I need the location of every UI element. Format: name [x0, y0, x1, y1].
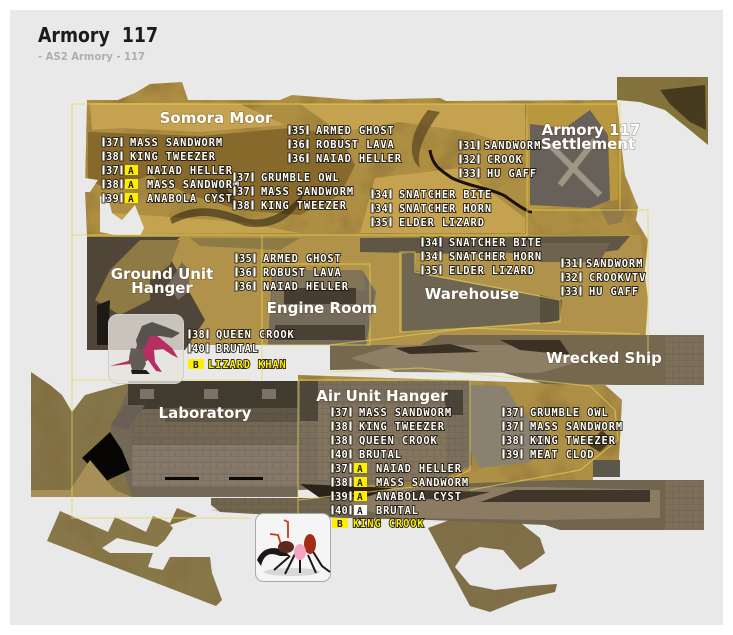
band under Somora grey shapes	[190, 238, 300, 250]
monster list: Air Unit Hanger: BRUTAL	[359, 449, 402, 461]
monster list: Air Unit Hanger: QUEEN CROOK	[359, 435, 438, 447]
monster list: Warehouse north: 34	[425, 237, 438, 249]
monster list: Engine Room: ROBUST LAVA	[263, 267, 342, 279]
lower ship	[211, 480, 704, 530]
monster list: Air Unit Hanger: 37	[335, 407, 348, 419]
monster list: Ground Unit Hanger boss: 40	[192, 343, 205, 355]
monster list: Somora Moor east	[459, 140, 541, 180]
monster list: Somora Moor west: MASS SANDWORM	[130, 137, 223, 149]
monster list: Air Unit Hanger: A	[357, 464, 363, 475]
heading: Armory 117 Settlement	[541, 121, 640, 153]
monster list: Somora Moor centre: MASS SANDWORM	[261, 186, 354, 198]
monster list: Air Unit Hanger: NAIAD HELLER	[376, 463, 462, 475]
monster list: Air Unit Hanger: B	[337, 519, 343, 530]
mid band grey top strip	[360, 236, 630, 258]
region labels	[111, 109, 662, 422]
monster list: Somora Moor south	[371, 189, 492, 229]
monster list: Warehouse east: 31	[565, 258, 578, 270]
monster list: Air Unit Hanger: MASS SANDWORM	[376, 477, 469, 489]
monster list: Warehouse north: SNATCHER BITE	[449, 237, 542, 249]
monster list: Somora Moor north	[288, 125, 402, 165]
monster list: Somora Moor centre: 37	[237, 172, 250, 184]
monster list: Somora Moor south: ELDER LIZARD	[399, 217, 485, 229]
monster list: Ground Unit Hanger boss: B	[193, 360, 199, 371]
monster list: lower right area: 39	[506, 449, 519, 461]
monster list: Ground Unit Hanger boss: LIZARD KHAN	[208, 359, 287, 371]
Engine Room building	[268, 270, 376, 345]
monster list: Air Unit Hanger: 39	[335, 491, 348, 503]
monster list: lower right area: KING TWEEZER	[530, 435, 616, 447]
monster list: Air Unit Hanger: 40	[335, 449, 348, 461]
monster list: Somora Moor north: ROBUST LAVA	[316, 139, 395, 151]
monster list: Somora Moor centre: 37	[237, 186, 250, 198]
heading: Armory 117 Settlement: Armory 117	[542, 121, 640, 139]
heading: Laboratory: Laboratory	[159, 404, 252, 422]
monster list: Warehouse north	[421, 237, 542, 277]
monster list: Warehouse north: SNATCHER HORN	[449, 251, 542, 263]
monster list: Somora Moor west: A	[128, 180, 134, 191]
heading: Air Unit Hanger: Air Unit Hanger	[316, 387, 448, 405]
monster list: Somora Moor west: 37	[106, 165, 119, 177]
monster list: Warehouse east: CROOKVTV	[589, 272, 646, 284]
monster list: Somora Moor south: 34	[375, 189, 388, 201]
desert brown middle	[88, 128, 355, 215]
monster list: Somora Moor north: 35	[292, 125, 305, 137]
monster list: Somora Moor west: 39	[106, 193, 119, 205]
bottom middle rock	[428, 517, 557, 612]
yellow zone outlines	[72, 104, 648, 518]
monster list: Air Unit Hanger: 38	[335, 477, 348, 489]
monster list: Ground Unit Hanger boss: BRUTAL	[216, 343, 259, 355]
desert dark ridges	[170, 178, 305, 227]
monster list: Engine Room: 35	[239, 253, 252, 265]
mid band mustard	[87, 235, 648, 345]
monster list: Somora Moor south: SNATCHER BITE	[399, 189, 492, 201]
heading: Armory 117 Settlement: Settlement	[541, 135, 635, 153]
subtitle: - AS2 Armory - 117	[38, 51, 145, 63]
Wrecked Ship	[330, 335, 704, 385]
monster list: Somora Moor west: A	[128, 166, 134, 177]
monster list: Engine Room: 36	[239, 267, 252, 279]
monster list: lower right area: MEAT CLOD	[530, 449, 594, 461]
Laboratory	[110, 381, 298, 497]
monster list: Warehouse east: 32	[565, 272, 578, 284]
monster list: Ground Unit Hanger boss	[188, 329, 295, 371]
cave	[82, 432, 130, 485]
monster list: Somora Moor west: 38	[106, 151, 119, 163]
monster list: Somora Moor north: ARMED GHOST	[316, 125, 395, 137]
monster list: Somora Moor east: 33	[463, 168, 476, 180]
Somora Moor desert	[85, 82, 648, 345]
heading: Wrecked Ship: Wrecked Ship	[546, 349, 662, 367]
monster list: Somora Moor east: SANDWORM	[484, 140, 541, 152]
monster list: Air Unit Hanger: A	[357, 478, 363, 489]
monster list: Engine Room: NAIAD HELLER	[263, 281, 349, 293]
monster list: Air Unit Hanger: 40	[335, 505, 348, 517]
card: Lizard Khan boss portrait	[108, 314, 184, 384]
icon: ant creature	[257, 520, 330, 576]
monster list: Somora Moor west: MASS SANDWORM	[147, 179, 240, 191]
heading: Somora Moor: Somora Moor	[160, 109, 273, 127]
monster list: Air Unit Hanger: 38	[335, 435, 348, 447]
settlement base	[530, 110, 610, 208]
monster list: Somora Moor west: NAIAD HELLER	[147, 165, 233, 177]
monster list: Warehouse east: SANDWORM	[586, 258, 643, 270]
heading: Ground Unit Hanger: Hanger	[131, 279, 193, 297]
monster list: Somora Moor east: 31	[463, 140, 476, 152]
grey block lower right	[470, 385, 555, 468]
monster list: Engine Room	[235, 253, 349, 293]
south lower mustard area	[298, 375, 622, 490]
title: Armory 117	[38, 23, 158, 47]
right mid brown rock	[520, 243, 610, 262]
monster list: Ground Unit Hanger boss: QUEEN CROOK	[216, 329, 295, 341]
monster list: Somora Moor west	[102, 137, 240, 205]
monster list: Air Unit Hanger: 38	[335, 421, 348, 433]
monster list: Air Unit Hanger: ANABOLA CYST	[376, 491, 462, 503]
white river inlet	[85, 178, 144, 236]
monster list: Air Unit Hanger: A	[357, 506, 363, 517]
monster list: Somora Moor centre: GRUMBLE OWL	[261, 172, 340, 184]
monster list: lower right area: MASS SANDWORM	[530, 421, 623, 433]
monster list: Air Unit Hanger: KING TWEEZER	[359, 421, 445, 433]
monster list: Somora Moor centre: 38	[237, 200, 250, 212]
monster list: Warehouse east: HU GAFF	[589, 286, 639, 298]
icon: lizard creature	[110, 322, 180, 374]
heading: Ground Unit Hanger	[111, 265, 213, 297]
monster list: Warehouse north: ELDER LIZARD	[449, 265, 535, 277]
Warehouse building	[402, 252, 560, 332]
Air Unit Hanger building	[298, 381, 472, 490]
monster list: Somora Moor east: 32	[463, 154, 476, 166]
top-right rock corner	[617, 77, 708, 145]
monster list: Somora Moor south: SNATCHER HORN	[399, 203, 492, 215]
left bottom rock	[31, 372, 135, 497]
card: King Crook boss portrait	[256, 514, 330, 582]
monster list: Somora Moor east: CROOK	[487, 154, 523, 166]
map terrain	[31, 77, 708, 612]
monster list: lower right area: 37	[506, 421, 519, 433]
heading: Ground Unit Hanger: Ground Unit	[111, 265, 213, 283]
heading: Warehouse: Warehouse	[425, 285, 519, 303]
monster list: Warehouse north: 35	[425, 265, 438, 277]
monster list: Warehouse east: 33	[565, 286, 578, 298]
monster list: Air Unit Hanger: MASS SANDWORM	[359, 407, 452, 419]
monster list: Somora Moor south: 35	[375, 217, 388, 229]
monster list: Engine Room: 36	[239, 281, 252, 293]
monster list: Somora Moor north: 36	[292, 153, 305, 165]
monster list: Somora Moor west: ANABOLA CYST	[147, 193, 233, 205]
monster list: Air Unit Hanger: 37	[335, 463, 348, 475]
monster list: lower right area: 38	[506, 435, 519, 447]
monster list: Warehouse east	[561, 258, 646, 298]
monster list: Air Unit Hanger: KING CROOK	[353, 518, 425, 530]
monster list: Somora Moor west: A	[128, 194, 134, 205]
monster list: Air Unit Hanger: BRUTAL	[376, 505, 419, 517]
bottom left rock	[47, 508, 222, 606]
desert light dunes	[90, 103, 525, 234]
corner rock shadow	[660, 85, 706, 130]
monster list: Ground Unit Hanger boss: 38	[192, 329, 205, 341]
monster list: Somora Moor south: 34	[375, 203, 388, 215]
monster list: lower right area: 37	[506, 407, 519, 419]
monster list: Somora Moor north: NAIAD HELLER	[316, 153, 402, 165]
heading: Engine Room: Engine Room	[267, 299, 377, 317]
monster list: Somora Moor east: HU GAFF	[487, 168, 537, 180]
monster list: Somora Moor centre: KING TWEEZER	[261, 200, 347, 212]
monster list: Somora Moor west: 38	[106, 179, 119, 191]
monster list: lower right area: GRUMBLE OWL	[530, 407, 609, 419]
monster list: Engine Room: ARMED GHOST	[263, 253, 342, 265]
Ground Unit Hanger dark structure	[87, 237, 205, 350]
monster list: Somora Moor west: 37	[106, 137, 119, 149]
monster list: Warehouse north: 34	[425, 251, 438, 263]
monster list: Air Unit Hanger: A	[357, 492, 363, 503]
monster list: Somora Moor north: 36	[292, 139, 305, 151]
monster list: Somora Moor west: KING TWEEZER	[130, 151, 216, 163]
monster list: Air Unit Hanger	[331, 407, 469, 530]
monster list: lower right area	[502, 407, 623, 461]
monster list: Somora Moor centre	[233, 172, 354, 212]
